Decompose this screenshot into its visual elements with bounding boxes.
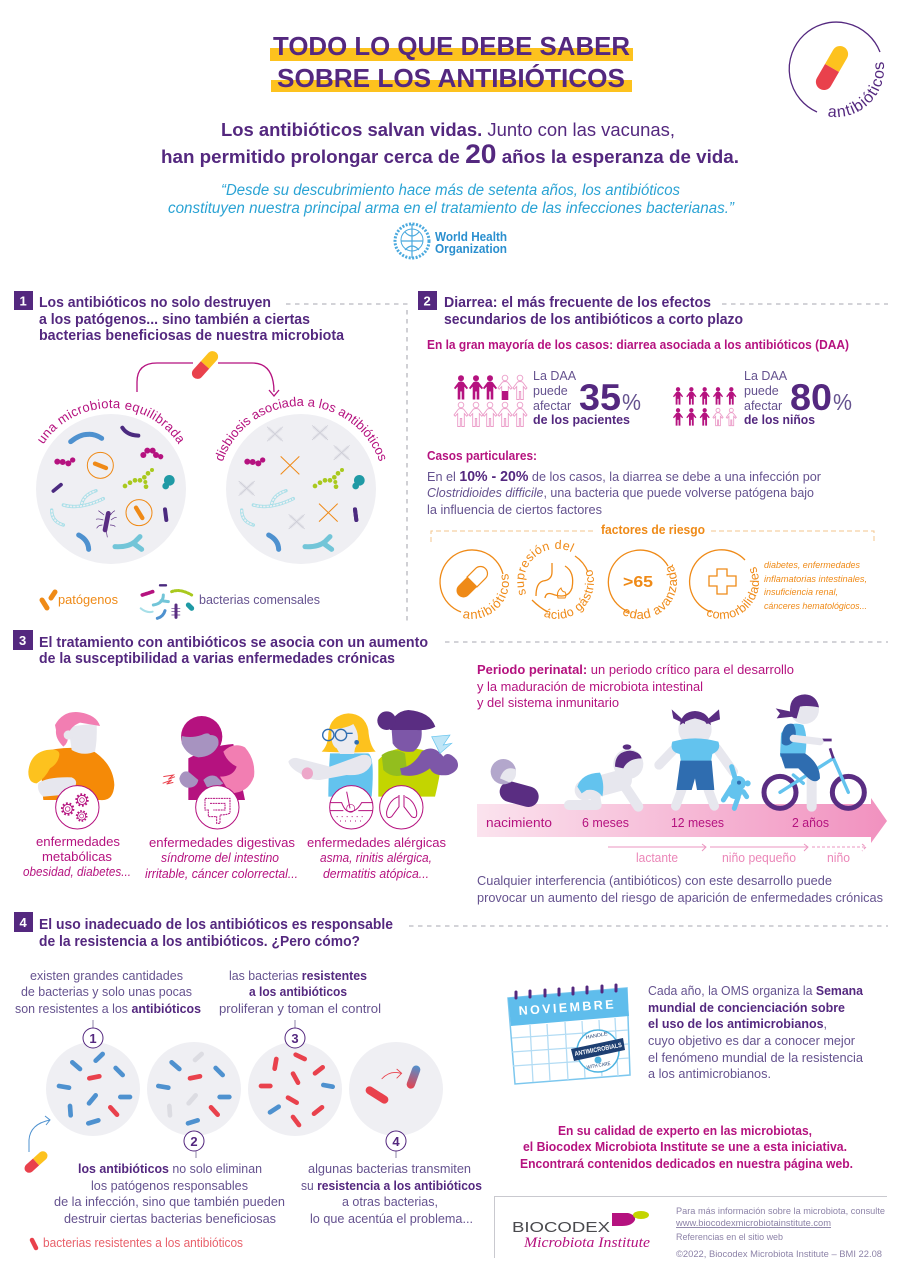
risk: gastric acid suppression: ácido gástrico	[544, 570, 594, 619]
step 1 circle	[46, 1020, 140, 1136]
timeline arrow: 2 años	[792, 816, 829, 830]
heading 1: 1	[20, 294, 27, 308]
stat 35%: afectar	[533, 399, 571, 413]
institute message: el Biocodex Microbiota Institute se une a esta iniciativa.	[523, 1139, 847, 1154]
logo: World Health Organization: World Health	[435, 230, 507, 244]
step text 1: de bacterias y solo unas pocas	[21, 984, 192, 999]
perinatal text: y del sistema inmunitario	[477, 695, 619, 710]
stage arrows	[608, 844, 866, 865]
logo: Biocodex Microbiota Institute	[512, 1211, 650, 1251]
footer text: Para más información sobre la microbiota, consulte	[676, 1206, 885, 1217]
footer text: ©2022, Biocodex Microbiota Institute – BMI 22.08	[676, 1249, 882, 1260]
footer text	[675, 1206, 885, 1260]
risk: comorbidities: comorbilidades	[707, 567, 759, 620]
label: metabolic	[23, 835, 131, 879]
figure: metabolic	[28, 712, 114, 829]
calendar icon: HANDLE	[585, 1031, 609, 1041]
icon: antibiotic with arrow	[137, 349, 279, 396]
perinatal text	[477, 662, 794, 710]
step 1 circle: 1	[89, 1031, 97, 1046]
badge: antibióticos	[788, 21, 884, 118]
stat 80%: 80	[790, 377, 832, 418]
footer text: Referencias en el sitio web	[676, 1232, 783, 1243]
logo: World Health Organization	[395, 224, 507, 258]
illustration: 6 months	[569, 744, 643, 807]
stage arrows: niño pequeño	[722, 851, 796, 865]
particular cases text	[427, 449, 822, 517]
title: TODO LO QUE DEBE SABER	[273, 31, 630, 61]
step text 2	[54, 1161, 285, 1226]
panel 2: diarrhea	[418, 291, 874, 620]
stat 35%: %	[622, 389, 641, 415]
institute message	[520, 1123, 853, 1171]
heading 4: de la resistencia a los antibióticos. ¿Pero cómo?	[39, 934, 360, 950]
comorbidities list: inflamatorias intestinales,	[764, 574, 867, 585]
WHO quote: “Desde su descubrimiento hace más de setenta años, los antibióticos	[221, 182, 680, 199]
panel 3: chronic diseases	[13, 630, 887, 905]
risk: advanced age	[608, 549, 678, 620]
calendar icon	[508, 985, 630, 1084]
calendar icon: WITH CARE	[586, 1061, 612, 1071]
title	[270, 31, 633, 93]
step text 2: destruir ciertas bacterias beneficiosas	[64, 1211, 276, 1226]
stat 80%: %	[833, 389, 852, 415]
heading 1: Los antibióticos no solo destruyen	[39, 295, 271, 311]
stat 80%: La DAA	[744, 369, 788, 383]
step text 2: los antibióticos no solo eliminan	[78, 1161, 262, 1176]
legend: resistant bacteria: bacterias resistentes a los antibióticos	[43, 1235, 243, 1250]
intro text: han permitido prolongar cerca de 20 años la esperanza de vida.	[161, 139, 739, 169]
label: allergic: enfermedades alérgicas	[307, 836, 446, 850]
step text 4: a otras bacterias,	[342, 1194, 438, 1209]
badge: antibióticos: antibióticos	[828, 62, 884, 118]
step text 2: de la infección, sino que también pueden	[54, 1194, 285, 1209]
comorbidities list: cánceres hematológicos...	[764, 601, 867, 612]
step text 3: las bacterias resistentes	[229, 968, 367, 983]
heading 1: bacterias beneficiosas de nuestra microbiota	[39, 328, 345, 344]
illustration: 2 years on bike	[764, 694, 864, 808]
heading 2: secundarios de los antibióticos a corto plazo	[444, 312, 743, 328]
figure: skin allergy	[288, 713, 376, 829]
pictogram: patients 35%	[454, 375, 527, 426]
heading 3: 3	[19, 633, 26, 648]
risk factors heading	[431, 523, 874, 542]
stat 80%	[744, 369, 852, 427]
step text 1	[15, 968, 201, 1016]
stat 35%: puede	[533, 384, 568, 398]
logo: Biocodex Microbiota Institute: BIOCODEX	[512, 1219, 610, 1236]
step text 1: existen grandes cantidades	[30, 968, 183, 983]
institute message: En su calidad de experto en las microbiotas,	[558, 1123, 812, 1138]
step 4 circle: 4	[392, 1134, 400, 1149]
awareness week text: cuyo objetivo es dar a conocer mejor	[648, 1033, 856, 1048]
legend: commensal bacteria	[141, 585, 320, 618]
step text 2: los patógenos responsables	[91, 1178, 248, 1193]
step text 4	[301, 1161, 482, 1226]
pictogram: children 80%	[673, 387, 736, 426]
calendar icon: ANTIMICROBIALS	[574, 1042, 623, 1058]
timeline arrow: nacimiento	[486, 816, 552, 830]
stat 80%: afectar	[744, 399, 782, 413]
perinatal text: y la maduración de microbiota intestinal	[477, 679, 703, 694]
label: allergic: asma, rinitis alérgica,	[320, 851, 432, 865]
comorbidities list: diabetes, enfermedades	[764, 560, 860, 571]
title: SOBRE LOS ANTIBIÓTICOS	[277, 63, 625, 93]
stat 35%	[533, 369, 641, 427]
label: digestive	[145, 836, 298, 881]
stat 80%: de los niños	[744, 413, 815, 427]
label: allergic	[307, 836, 446, 881]
heading 3: de la susceptibilidad a varias enfermedades crónicas	[39, 651, 395, 667]
step text 3: a los antibióticos	[249, 984, 347, 999]
logo: Biocodex Microbiota Institute: Microbiota Institute	[523, 1235, 650, 1251]
circle: dysbiosis	[216, 396, 386, 564]
circle: balanced microbiota: una microbiota equilibrada	[38, 399, 183, 444]
stat 80%: puede	[744, 384, 779, 398]
illustration: newborn	[491, 759, 528, 797]
intro text: Los antibióticos salvan vidas. Junto con las vacunas,	[221, 120, 675, 140]
label: digestive: irritable, cáncer colorrectal...	[145, 867, 298, 881]
step 3 circle	[248, 1020, 342, 1136]
interference text: Cualquier interferencia (antibióticos) con este desarrollo puede	[477, 873, 832, 888]
WHO quote: constituyen nuestra principal arma en el tratamiento de las infecciones bacterianas.”	[168, 200, 735, 217]
step 2 circle	[147, 1042, 241, 1158]
stat 35%: 35	[579, 377, 621, 418]
illustration: 12 months	[659, 709, 751, 808]
risk: antibiotics	[439, 549, 509, 619]
label: allergic: dermatitis atópica...	[323, 867, 429, 881]
heading 1	[14, 291, 345, 344]
interference text: provocar un aumento del riesgo de aparición de enfermedades crónicas	[477, 890, 883, 905]
logo: World Health Organization: Organization	[435, 242, 507, 256]
step 2 circle: 2	[190, 1134, 198, 1149]
heading 4: El uso inadecuado de los antibióticos es responsable	[39, 917, 393, 933]
label: digestive: enfermedades digestivas	[149, 836, 295, 850]
heading 3: El tratamiento con antibióticos se asocia con un aumento	[39, 635, 428, 651]
awareness week text: el fenómeno mundial de la resistencia	[648, 1050, 864, 1065]
label: metabolic: obesidad, diabetes...	[23, 865, 131, 879]
step 4 circle	[349, 1042, 443, 1158]
footer	[494, 1196, 887, 1260]
step 3 circle: 3	[291, 1031, 299, 1046]
stat 35%: La DAA	[533, 369, 577, 383]
panel 1: microbiota	[14, 291, 386, 620]
legend: pathogens: patógenos	[58, 592, 118, 607]
heading 2: 2	[424, 294, 431, 308]
risk: antibiotics: antibióticos	[463, 574, 509, 619]
stage arrows: niño	[827, 851, 850, 865]
comorbidities list	[764, 560, 867, 612]
label: metabolic: enfermedades	[36, 835, 120, 849]
awareness week text: el uso de los antimicrobianos,	[648, 1016, 827, 1031]
footer text: www.biocodexmicrobiotainstitute.com	[675, 1218, 831, 1229]
calendar icon: NOVIEMBRE	[518, 997, 614, 1018]
heading 4: 4	[20, 915, 28, 930]
timeline arrow: 6 meses	[582, 816, 629, 830]
timeline arrow	[477, 798, 887, 843]
particular cases text: Casos particulares:	[427, 449, 537, 463]
interference text	[477, 873, 883, 905]
awareness week text: Cada año, la OMS organiza la Semana	[648, 983, 864, 998]
circle: balanced microbiota	[36, 399, 186, 564]
figure: respiratory allergy	[377, 710, 458, 829]
label: digestive: síndrome del intestino	[161, 851, 279, 865]
subheading DAA: En la gran mayoría de los casos: diarrea asociada a los antibióticos (DAA)	[427, 338, 849, 352]
step text 3: proliferan y toman el control	[219, 1001, 381, 1016]
step text 4: lo que acentúa el problema...	[310, 1211, 473, 1226]
risk: comorbidities	[688, 549, 759, 620]
risk: advanced age: >65	[623, 574, 653, 591]
awareness week text: mundial de concienciación sobre	[648, 1000, 845, 1015]
risk: advanced age: edad avanzada	[623, 564, 678, 620]
particular cases text: En el 10% - 20% de los casos, la diarrea se debe a una infección por	[427, 469, 822, 485]
heading 2: Diarrea: el más frecuente de los efectos	[444, 295, 711, 311]
step text 1: son resistentes a los antibióticos	[15, 1001, 201, 1016]
timeline arrow: 12 meses	[671, 816, 724, 830]
heading 3	[13, 630, 428, 667]
step text 4: su resistencia a los antibióticos	[301, 1178, 482, 1193]
circle: dysbiosis: disbiosis asociada a los antibióticos	[216, 396, 386, 461]
perinatal text: Periodo perinatal: un periodo crítico para el desarrollo	[477, 662, 794, 677]
stat 35%: de los pacientes	[533, 413, 630, 427]
step text 4: algunas bacterias transmiten	[308, 1161, 471, 1176]
panel 4: resistance	[14, 912, 864, 1250]
step text 3	[219, 968, 381, 1016]
heading 1: a los patógenos... sino también a ciertas	[39, 312, 310, 328]
institute message: Encontrará contenidos dedicados en nuestra página web.	[520, 1156, 853, 1171]
particular cases text: Clostridioides difficile, una bacteria que puede volverse patógena bajo	[427, 485, 814, 500]
awareness week text: a los antimicrobianos.	[648, 1066, 771, 1081]
heading 4	[14, 912, 393, 950]
risk factors heading: factores de riesgo	[601, 523, 705, 537]
comorbidities list: insuficiencia renal,	[764, 587, 838, 598]
heading 2	[418, 291, 743, 328]
stage arrows: lactante	[636, 851, 678, 865]
particular cases text: la influencia de ciertos factores	[427, 502, 602, 517]
legend: commensal bacteria: bacterias comensales	[199, 592, 320, 607]
risk: gastric acid suppression: supresión del	[517, 540, 574, 596]
icon: antibiotic entering	[23, 1116, 50, 1175]
figure: digestive	[163, 716, 254, 829]
awareness week text	[648, 983, 864, 1081]
WHO quote	[168, 182, 735, 217]
risk: gastric acid suppression	[517, 540, 594, 619]
label: metabolic: metabólicas	[42, 850, 112, 864]
intro text	[161, 120, 739, 169]
